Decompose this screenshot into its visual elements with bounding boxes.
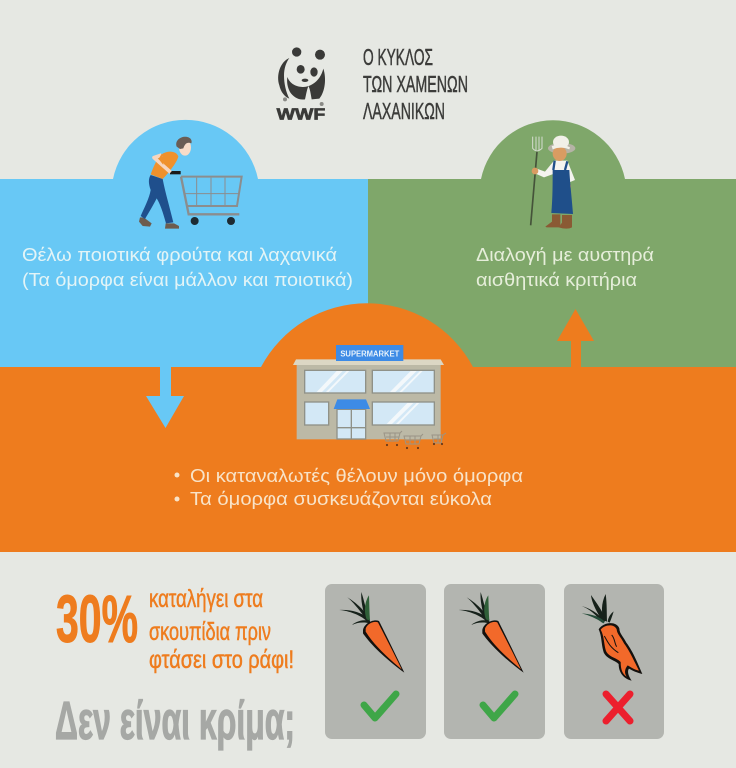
- title: [363, 44, 468, 124]
- panel: farmer (green): [368, 120, 736, 368]
- text: consumer wants: (Τα όμορφα είναι μάλλον και ποιοτικά): [22, 269, 353, 290]
- icon: check mark: [364, 694, 396, 718]
- title: ΛΑΧΑΝΙΚΩΝ: [363, 98, 445, 124]
- icon: carrot: [339, 592, 404, 673]
- card: straight carrot 1: [325, 584, 426, 739]
- panel: consumer (blue): [0, 120, 368, 368]
- icon: carrot: [459, 592, 524, 673]
- title: Ο ΚΥΚΛΟΣ: [363, 44, 433, 70]
- text: supermarket reasons: Τα όμορφα συσκευάζονται εύκολα: [190, 488, 492, 509]
- icon: supermarket building: [293, 345, 444, 439]
- arrow: down: [146, 367, 184, 428]
- heading: isn't it a pity: Δεν είναι κρίμα;: [55, 691, 295, 751]
- WWF panda logo: WWF: [277, 106, 326, 123]
- panel: supermarket (orange): [0, 303, 736, 552]
- title: ΤΩΝ ΧΑΜΕΝΩΝ: [363, 71, 468, 97]
- WWF panda logo: [277, 47, 326, 123]
- card: straight carrot 2: [444, 584, 545, 739]
- stat: 30%: 30%: [56, 582, 138, 657]
- text: strict selection: [476, 244, 654, 290]
- text: ends up in the bin: φτάσει στο ράφι!: [149, 646, 294, 674]
- icon: cross mark: [606, 694, 630, 721]
- text: supermarket reasons: [174, 465, 523, 509]
- text: consumer wants: [22, 244, 353, 290]
- arrow: up: [557, 309, 594, 368]
- text: supermarket reasons: Οι καταναλωτές θέλουν μόνο όμορφα: [190, 465, 523, 486]
- icon: ugly carrot: [582, 594, 642, 681]
- card: misshapen carrot: [564, 584, 664, 739]
- icon: small shopping carts: [384, 431, 446, 449]
- text: ends up in the bin: σκουπίδια πριν: [149, 618, 271, 646]
- text: strict selection: αισθητικά κριτήρια: [476, 269, 637, 290]
- icon: farmer with pitchfork: [531, 136, 575, 229]
- text: ends up in the bin: καταλήγει στα: [149, 585, 263, 613]
- text: consumer wants: Θέλω ποιοτικά φρούτα και λαχανικά: [22, 244, 337, 265]
- text: strict selection: Διαλογή με αυστηρά: [476, 244, 654, 265]
- sign text: SUPERMARKET: [340, 350, 399, 359]
- text: ends up in the bin: [149, 585, 294, 674]
- icon: check mark: [483, 694, 515, 718]
- icon: shopper with cart: [139, 137, 242, 229]
